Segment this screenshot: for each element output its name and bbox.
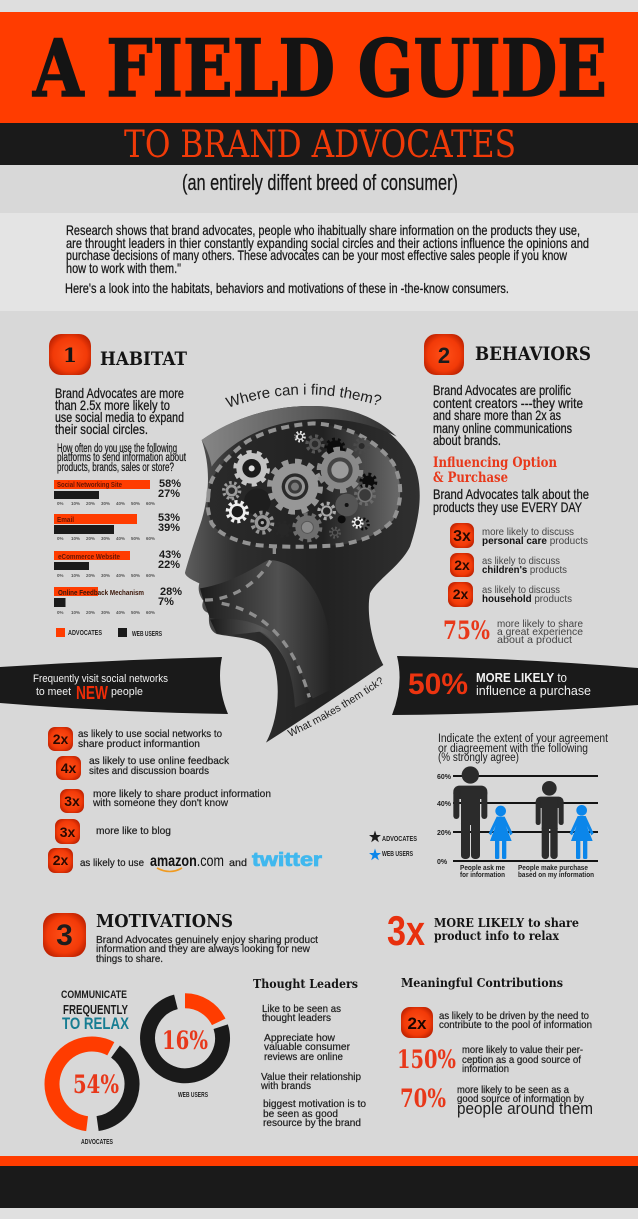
left banner: social networks: to meet [36,686,71,698]
left banner: social networks: NEW [76,683,108,703]
bar chart: online feedback mechanism: 60% [146,610,155,615]
stat: 75%: more likely to share [497,618,583,630]
bar chart: ecommerce website: 10% [71,573,80,578]
panel: habitat [49,334,187,638]
influencing heading [433,455,557,486]
pictogram people [453,766,594,859]
stat: 2x: contribute to the pool of information [439,1019,592,1031]
bar chart: social networking site: 10% [71,501,80,506]
meaningful contributions [397,975,593,1118]
stat: 75% [443,616,583,646]
panel: social stats list [48,727,323,873]
bar chart: online feedback mechanism [54,586,182,615]
stat: children's [450,553,567,577]
thought leaders: reviews are online [264,1051,343,1063]
right banner: influence a purchase [392,656,638,715]
motivations text: things to share. [96,953,163,965]
brain area [208,423,400,547]
motivations text [96,934,318,965]
stat: 75%: 75% [443,616,490,645]
donut: advocates 54%: ADVOCATES [81,1139,113,1146]
chart legend [56,628,162,638]
survey question: platforms to send information about [57,452,187,464]
thought leaders: resource by the brand [263,1117,361,1129]
neck shading [210,619,313,707]
stat: online feedback: 4x [61,760,76,776]
everyday text [433,486,589,515]
stat: children's: 2x [454,557,470,573]
chart captions: for information [460,872,505,879]
chart title [438,733,609,764]
thought leaders: thought leaders [262,1012,331,1024]
stat: amazon and twitter: and [229,857,247,869]
communicate heading: FREQUENTLY [63,1002,128,1017]
bar chart: online feedback mechanism: 7% [158,596,174,608]
bar chart: social networking site: 0% [57,501,64,506]
badge 1: 1 [63,343,77,367]
bar chart: email: 39% [158,522,180,534]
stat: blog: 3x [60,824,75,840]
bar chart: ecommerce website: 20% [86,573,95,578]
bar chart: online feedback mechanism: 0% [57,610,64,615]
bar chart: email: 0% [57,536,64,541]
stat: 150%: ception as a good source of [462,1054,581,1066]
gears [224,432,376,540]
bar chart: email: 10% [71,536,80,541]
intro paragraph: Here's a look into the habitats, behaviors and motivations of these in -the-know consumers. [65,280,509,296]
bar chart: social networking site: 58% [159,478,181,490]
web user figure 2 [570,805,594,859]
stat: personal care: personal care products [482,535,588,547]
bar chart: online feedback mechanism: Online Feedback Mechanism [58,590,144,597]
habitat text: than 2.5x more likely to [55,397,170,413]
stat: 150%: more likely to value their per- [462,1044,583,1056]
bar chart: online feedback mechanism: 40% [116,610,125,615]
chart title: or diagreement with the following [438,743,588,755]
donut: web users 16%: WEB USERS [178,1092,208,1099]
stat: personal care [450,523,588,548]
stat: 70%: more likely to be seen as a [457,1084,569,1096]
subtitle banner [0,123,638,166]
curved label: what makes them tick: What makes them tick? [287,677,382,736]
survey question [57,443,187,474]
panel: behaviors [424,334,591,646]
stat: 150%: information [462,1063,509,1075]
badge 1 [49,334,91,375]
legend: advocates: ADVOCATES [382,836,417,843]
stat: household: 2x [453,586,468,602]
behaviors text: and share more than 2x as [433,407,561,423]
curved label: where can i find them: Where can i find them? [225,384,382,407]
bar chart: ecommerce website: 22% [158,559,180,571]
stat: 2x: 2x [408,1014,427,1033]
web user figure 1 [489,806,513,859]
thought leaders: Like to be seen as [262,1003,341,1015]
stat: 75%: about a product [497,634,572,646]
thought leaders [253,976,366,1129]
forehead highlight [202,406,397,467]
donut: advocates 54% [52,1044,132,1146]
bar chart: email: 53% [158,512,180,524]
thought leaders: biggest motivation is to [263,1098,366,1110]
intro paragraph [65,222,589,296]
panel: motivations [43,907,593,1146]
stat: personal care: more likely to discuss [482,526,574,538]
stat: 3x more likely: MORE LIKELY to share [434,916,579,930]
everyday text: Brand Advocates talk about the [433,486,589,502]
stat: 2x: as likely to be driven by the need to [439,1010,589,1022]
motivations text: information and they are always looking for new [96,943,310,955]
stat: 70% [400,1084,593,1118]
amazon logo: amazon.com [150,853,224,870]
thought leaders: Thought Leaders [253,976,358,991]
bar chart: ecommerce website: 43% [159,549,181,561]
behaviors heading: BEHAVIORS [475,344,591,365]
badge 2: 2 [438,343,450,368]
stat: social networks: share product informantion [78,738,200,750]
chart captions: based on my information [518,872,594,879]
chart gridlines and axis labels: 0% [437,859,448,866]
twitter logo: twitter [252,850,323,871]
behaviors text [433,382,583,448]
stat: 150% [397,1044,583,1075]
bar chart: email: 20% [86,536,95,541]
stat: household: household products [482,593,572,605]
title banner [0,12,638,123]
behaviors text: many online communications [433,420,572,436]
stat: social networks: as likely to use social networks to [78,728,222,740]
stat: amazon and twitter: as likely to use [80,857,144,869]
stat: personal care: 3x [453,528,471,545]
influencing heading: Influencing Option [433,455,557,471]
bar chart: email: Email [57,517,74,524]
motivations heading: MOTIVATIONS [96,911,233,932]
tagline: (an entirely diffent breed of consumer) [182,170,458,195]
chart title: Indicate the extent of your agreement [438,733,609,745]
thought leaders: Value their relationship [261,1071,361,1083]
bar chart: online feedback mechanism: 30% [101,610,110,615]
legend: advocates [369,830,417,843]
chart title: (% strongly agree) [438,752,519,764]
right banner: influence a purchase: influence a purchase [476,683,591,698]
badge 3 [43,913,86,957]
behaviors text: about brands. [433,432,501,448]
stat: 3x more likely: product info to relax [434,929,560,943]
bar chart: social networking site: Social Networking Site [57,482,122,489]
habitat text [55,385,184,437]
habitat text: use social media to expand [55,409,184,425]
left banner: social networks: people [111,686,143,698]
stat: social networks [48,727,222,751]
donut: advocates 54%: 54% [73,1070,119,1099]
stat: blog [55,819,171,844]
donut: web users 16%: 16% [162,1026,208,1055]
bar chart: social networking site [54,478,181,506]
neck dashed lines [205,548,309,697]
stat: 70%: good source of information by [457,1093,585,1105]
bar chart: social networking site: 60% [146,501,155,506]
chart gridlines and axis labels: 60% [437,774,452,781]
stat: online feedback [56,755,230,780]
behaviors text: Brand Advocates are prolific [433,382,571,398]
thought leaders: with brands [260,1080,311,1092]
bar chart: ecommerce website: 50% [131,573,140,578]
left banner: social networks [0,657,228,714]
bar chart: email [54,512,180,541]
communicate heading [61,989,130,1033]
bar chart: ecommerce website: eCommerce Website [58,554,120,561]
legend: web users: WEB USERS [382,851,413,858]
bar chart: email: 60% [146,536,155,541]
communicate heading: TO RELAX [62,1014,130,1033]
badge 2 [424,334,464,375]
bar chart: email: 30% [101,536,110,541]
right banner: influence a purchase: MORE LIKELY to [476,670,567,685]
head illustration with gears [185,406,420,743]
bar chart: email: 40% [116,536,125,541]
stat: 70%: people around them [457,1099,593,1118]
chart legend: WEB USERS [132,631,162,638]
stat: 2x [401,1007,592,1038]
bar chart: online feedback mechanism: 20% [86,610,95,615]
stat: household: as likely to discuss [482,584,560,596]
motivations text: Brand Advocates genuinely enjoy sharing product [96,934,318,946]
stat: social networks: 2x [53,731,68,747]
stat: 70%: 70% [400,1084,446,1113]
throat shading [200,560,330,707]
survey question: products, brands, sales or store? [57,462,174,474]
survey question: How often do you use the following [57,443,177,455]
bar chart: social networking site: 20% [86,501,95,506]
stat: household [448,582,572,607]
right banner: influence a purchase: 50% [408,668,468,701]
communicate heading: COMMUNICATE [61,989,127,1001]
chart gridlines and axis labels [437,774,598,866]
bar chart: social networking site: 50% [131,501,140,506]
chart legend: ADVOCATES [68,630,102,637]
stat: online feedback: as likely to use online feedback [89,755,230,767]
bar chart: online feedback mechanism: 28% [160,586,182,598]
thought leaders: be seen as good [263,1108,338,1120]
stat: children's: children's products [482,564,567,576]
chart gridlines and axis labels: 20% [437,830,452,837]
chart captions [460,865,594,879]
bar chart: ecommerce website: 0% [57,573,64,578]
behaviors text: content creators ---they write [433,395,583,411]
bar chart: social networking site: 40% [116,501,125,506]
bar chart: social networking site: 30% [101,501,110,506]
bar chart: social networking site: 27% [158,488,180,500]
stat: share information: 3x [64,793,80,809]
meaningful contributions: Meaningful Contributions [401,975,563,990]
stat: children's: as likely to discuss [482,555,560,567]
footer bands [0,1156,638,1219]
bar chart: ecommerce website: 30% [101,573,110,578]
bar chart: online feedback mechanism: 10% [71,610,80,615]
panel: agreement chart [369,733,609,879]
bar chart: ecommerce website: 40% [116,573,125,578]
stat: share information [60,788,271,813]
subtitle: TO BRAND ADVOCATES [124,123,516,166]
stat: online feedback: sites and discussion boards [89,765,209,777]
stat: 75%: a great experience [497,626,583,638]
badge 3: 3 [56,919,73,952]
habitat text: their social circles. [55,421,148,437]
intro paragraph: how to work with them." [66,260,181,276]
left banner: social networks: Frequently visit social networks [33,673,168,685]
bar chart: online feedback mechanism: 50% [131,610,140,615]
stat: amazon and twitter: 2x [53,852,68,868]
stat: 150%: 150% [397,1045,456,1074]
chart captions: People make purchase [518,865,588,872]
stat: 3x more likely [387,907,579,954]
stat: blog: more like to blog [96,825,171,837]
thought leaders: Appreciate how [264,1032,335,1044]
stat: 3x more likely: 3x [387,907,426,954]
bar chart: ecommerce website: 60% [146,573,155,578]
chart gridlines and axis labels: 40% [437,801,452,808]
everyday text: products they use EVERY DAY [433,499,583,515]
chart captions: People ask me [460,865,505,872]
advocate figure 2 [536,781,564,859]
donut: web users 16% [148,1001,223,1099]
advocate figure 1 [453,766,487,859]
legend: web users [369,848,413,860]
stat: amazon and twitter [48,848,323,873]
stat: share information: with someone they don't know [92,797,228,809]
habitat text: Brand Advocates are more [55,385,184,401]
bar chart: email: 50% [131,536,140,541]
thought leaders: valuable consumer [264,1041,350,1053]
influencing heading: & Purchase [433,470,508,486]
stat: share information: more likely to share product information [93,788,271,800]
habitat heading: HABITAT [100,349,187,370]
head silhouette [185,406,420,743]
bar chart: ecommerce website [54,549,181,578]
